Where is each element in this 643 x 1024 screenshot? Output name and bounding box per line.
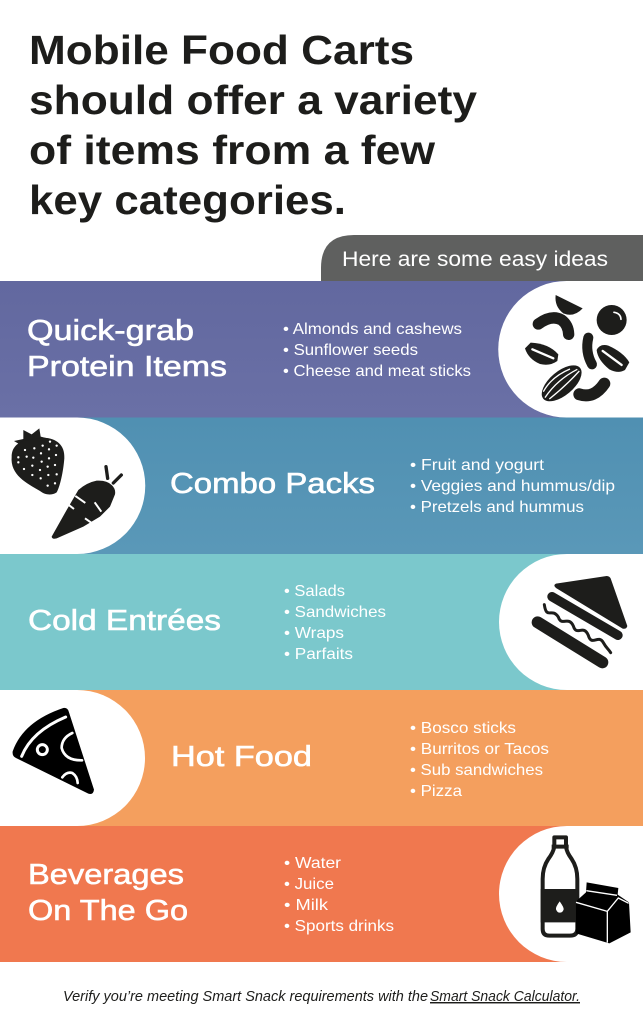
list: protein items: • Sunflower seeds [283,342,418,359]
list: cold entrees: • Parfaits [284,646,353,663]
icon: pizza slice [13,708,94,794]
heading: beverages on the go [28,859,188,927]
list: beverages: • Milk [284,897,329,914]
title: key categories. [29,177,346,223]
footer note: Smart Snack Calculator. [430,989,580,1005]
footer note: Verify you’re meeting Smart Snack requirements with the [63,989,428,1005]
heading: cold entrees: Cold Entrées [28,605,221,637]
panel: beverages on the go [0,826,643,962]
heading: hot food: Hot Food [171,741,312,773]
list: protein items [283,321,471,380]
subtitle tab: Here are some easy ideas [342,248,608,271]
list: cold entrees: • Wraps [284,625,344,642]
panel: cold entrees [0,554,643,690]
list: hot food: • Bosco sticks [410,720,516,737]
list: hot food: • Burritos or Tacos [410,741,549,758]
list: hot food: • Sub sandwiches [410,762,543,779]
list: combo packs [410,457,615,516]
list: hot food: • Pizza [410,783,462,800]
list: hot food [410,720,549,800]
panel: hot food [0,690,643,826]
title: Mobile Food Carts [29,27,414,73]
heading: quick-grab protein items: Protein Items [27,351,227,383]
list: beverages [284,855,394,935]
heading: beverages on the go: On The Go [28,895,188,927]
list: protein items: • Cheese and meat sticks [283,363,471,380]
list: protein items: • Almonds and cashews [283,321,462,338]
list: combo packs: • Fruit and yogurt [410,457,545,474]
icon: sandwich [538,576,627,662]
panel: combo packs [0,418,643,554]
list: cold entrees: • Sandwiches [284,604,386,621]
heading: quick-grab protein items: Quick-grab [27,315,194,347]
list: beverages: • Water [284,855,342,872]
icon: nuts and seeds [525,295,629,408]
list: beverages: • Juice [284,876,334,893]
title [29,27,477,223]
heading: beverages on the go: Beverages [28,859,184,891]
list: combo packs: • Veggies and hummus/dip [410,478,615,495]
icon: bottle and carton [541,837,631,943]
list: cold entrees [284,583,386,663]
panel: quick-grab protein items [0,281,643,418]
list: cold entrees: • Salads [284,583,345,600]
heading: combo packs: Combo Packs [170,468,375,500]
icon: strawberry and carrot [12,428,121,539]
list: beverages: • Sports drinks [284,918,394,935]
subtitle tab [321,235,643,281]
list: combo packs: • Pretzels and hummus [410,499,584,516]
heading: quick-grab protein items [27,315,227,383]
title: should offer a variety [29,77,477,123]
title: of items from a few [29,127,435,173]
